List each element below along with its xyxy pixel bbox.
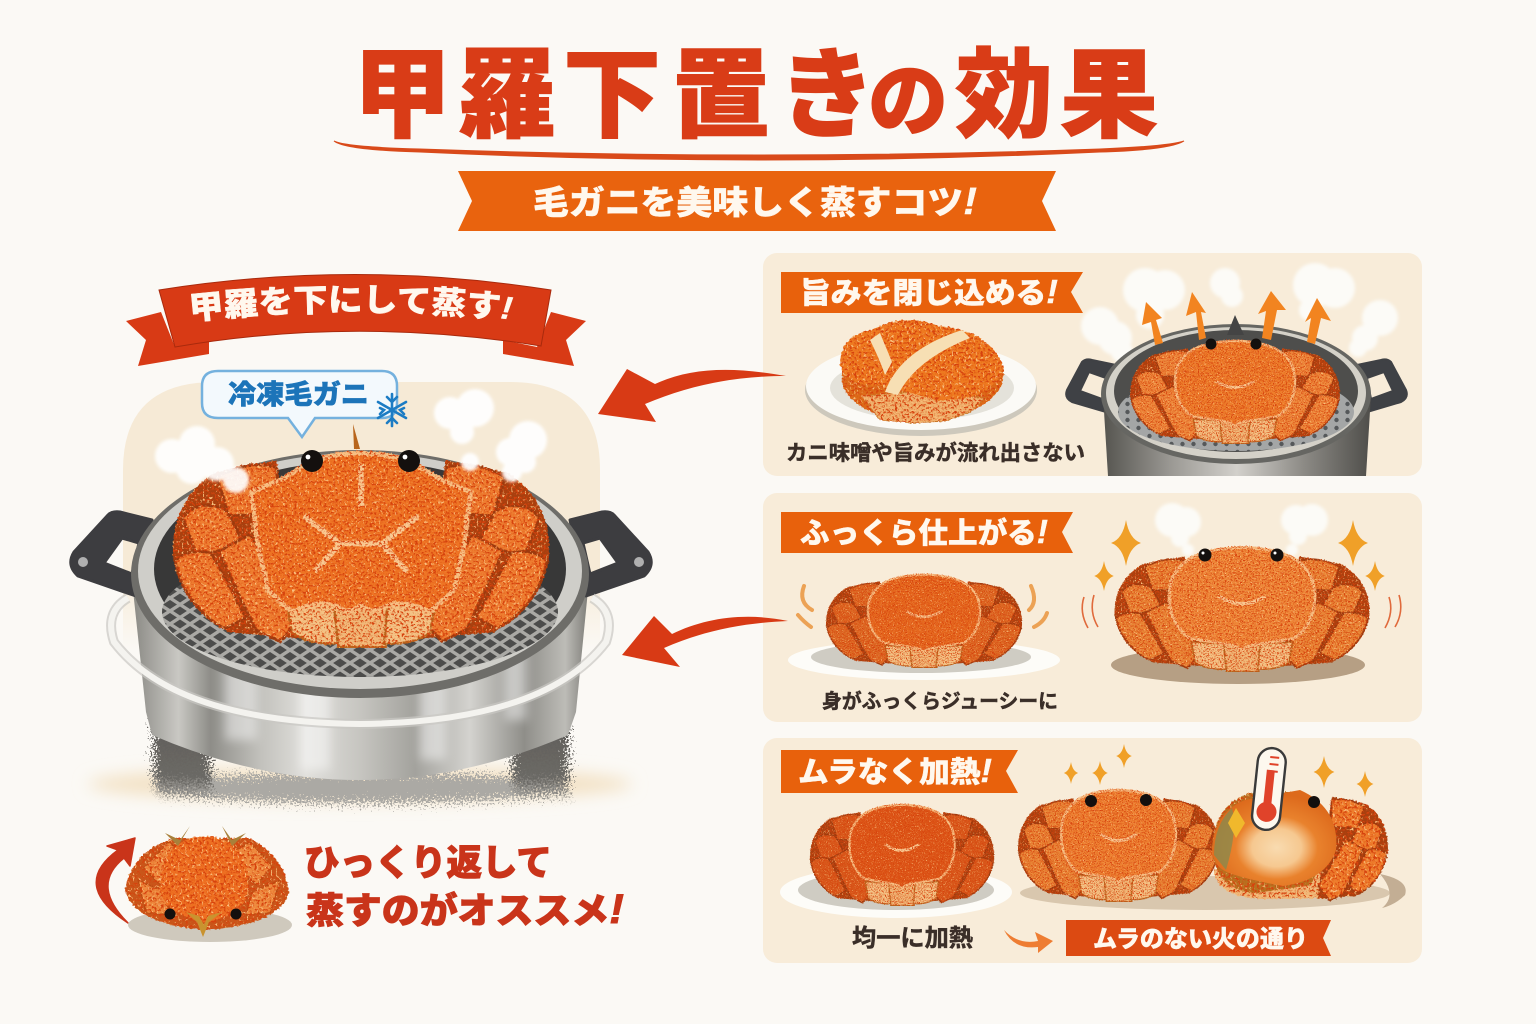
vibration lines — [1082, 595, 1401, 628]
ribbon body — [159, 274, 551, 347]
diamond highlight — [1228, 808, 1245, 838]
title underline swoosh — [334, 141, 1184, 160]
title: 甲羅下置きの効果 — [353, 40, 1158, 150]
beige arch backdrop — [123, 382, 600, 650]
panel: plump finish — [763, 493, 1422, 722]
caption: 身がふっくらジューシーに — [822, 689, 1058, 713]
shadow — [1111, 646, 1365, 684]
tip text: ひっくり返して — [304, 842, 552, 883]
icon: thermometer — [1251, 747, 1287, 831]
pot handle left — [71, 512, 152, 596]
pot rim — [131, 450, 589, 698]
curved flip arrow — [96, 838, 135, 923]
caption: 均一に加熱 — [852, 925, 973, 952]
rising heat arrows — [1142, 291, 1331, 345]
pot handle right — [570, 512, 651, 596]
ribbon: cook shell-side down — [126, 274, 586, 366]
plump crab, after — [1115, 547, 1369, 671]
pot stand legs — [154, 720, 568, 798]
sparkles — [1064, 744, 1373, 797]
callout text: 冷凍毛ガニ — [228, 380, 369, 410]
heading ribbon: 旨みを閉じ込める ! — [800, 273, 1058, 310]
pot handle right — [1357, 359, 1407, 412]
sparkles — [1094, 520, 1385, 591]
crab with cracked shell — [840, 320, 1004, 423]
ribbon right tail — [503, 312, 586, 366]
steamed crab, before — [826, 575, 1022, 668]
crab shadow — [128, 908, 292, 942]
steam left — [155, 426, 249, 493]
flipped crab — [125, 826, 289, 937]
crab eyes — [301, 450, 420, 472]
panel: even heating — [763, 738, 1422, 963]
glass steam ring — [111, 598, 609, 724]
flipped crab spikes — [165, 826, 246, 846]
pot handle left — [1066, 359, 1116, 412]
arrow: to top benefit — [598, 369, 786, 422]
tip text — [304, 842, 624, 932]
small pot — [1101, 315, 1371, 476]
ribbon left tail — [126, 312, 209, 366]
panel: flip tip — [96, 826, 624, 942]
steam clouds — [1081, 263, 1398, 363]
unevenly heated crab — [1212, 790, 1388, 901]
caption: カニ味噌や旨みが流れ出さない — [786, 441, 1085, 465]
flipped crab mouthparts — [186, 912, 222, 937]
steam streaks on pot — [225, 650, 527, 770]
heading ribbon: ムラなく加熱 ! — [798, 752, 992, 789]
flipped crab eyes — [164, 908, 242, 920]
callout: frozen crab — [202, 371, 406, 437]
panel: main steaming illustration — [71, 371, 651, 803]
plate — [780, 866, 1012, 918]
steam right — [434, 389, 547, 482]
pot body — [133, 590, 588, 780]
subtitle text: 毛ガニを美味しく蒸すコツ ! — [533, 181, 977, 223]
tip text: 蒸すのがオススメ ! — [306, 885, 624, 932]
ribbon text: 甲羅を下にして蒸す! — [191, 285, 514, 322]
steaming grate — [162, 547, 558, 677]
evenly cooked crab — [810, 805, 994, 906]
heading ribbon: ふっくら仕上がる! — [800, 513, 1048, 550]
arrow: to middle benefit — [622, 616, 788, 667]
shadow under crabs — [1020, 874, 1406, 910]
result label: ムラのない火の通り — [1093, 926, 1308, 953]
even crab — [1018, 790, 1219, 901]
shell crack — [870, 330, 970, 395]
steam clouds — [1155, 503, 1328, 556]
small arrow — [1004, 930, 1053, 953]
plate — [788, 640, 1060, 680]
icon: snowflake — [378, 394, 406, 426]
main crab, shell side down — [173, 424, 549, 647]
panel: locks in flavour — [763, 253, 1422, 476]
crab in small pot — [1130, 338, 1340, 444]
plate — [805, 342, 1037, 436]
result label — [1066, 920, 1331, 956]
subtitle banner — [458, 171, 1056, 231]
ground dust — [88, 766, 632, 803]
motion marks — [798, 586, 1047, 627]
